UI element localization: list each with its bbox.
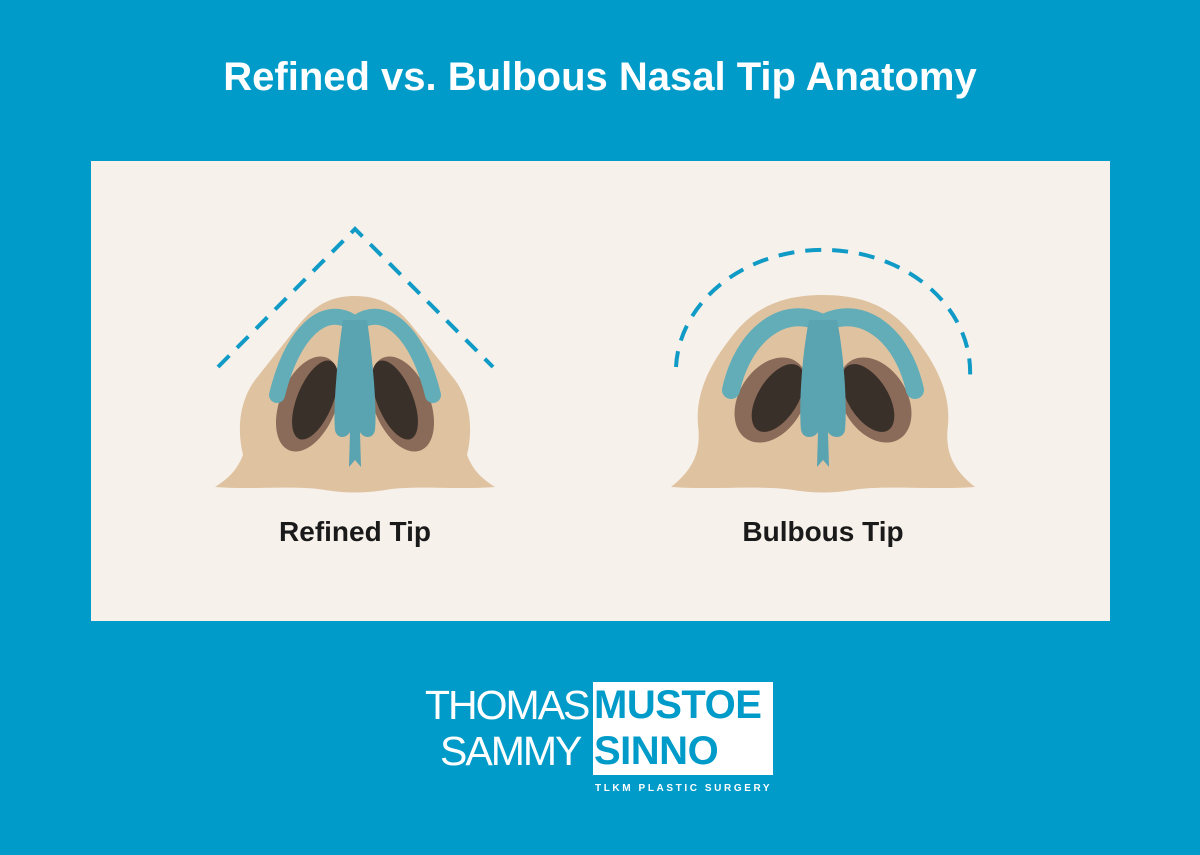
panel: comparison: [91, 161, 1110, 621]
logo: [425, 682, 773, 794]
logo: THOMAS: [425, 682, 588, 728]
logo: SAMMY: [440, 728, 580, 774]
title: Refined vs. Bulbous Nasal Tip Anatomy: [223, 55, 977, 99]
logo: SINNO: [594, 729, 718, 773]
label: refined tip: Refined Tip: [279, 516, 431, 547]
logo: TLKM PLASTIC SURGERY: [595, 783, 772, 794]
logo: MUSTOE: [594, 683, 761, 727]
diagram: bulbous tip: [671, 250, 975, 492]
label: bulbous tip: Bulbous Tip: [742, 516, 904, 547]
diagram: refined tip: [215, 229, 495, 492]
